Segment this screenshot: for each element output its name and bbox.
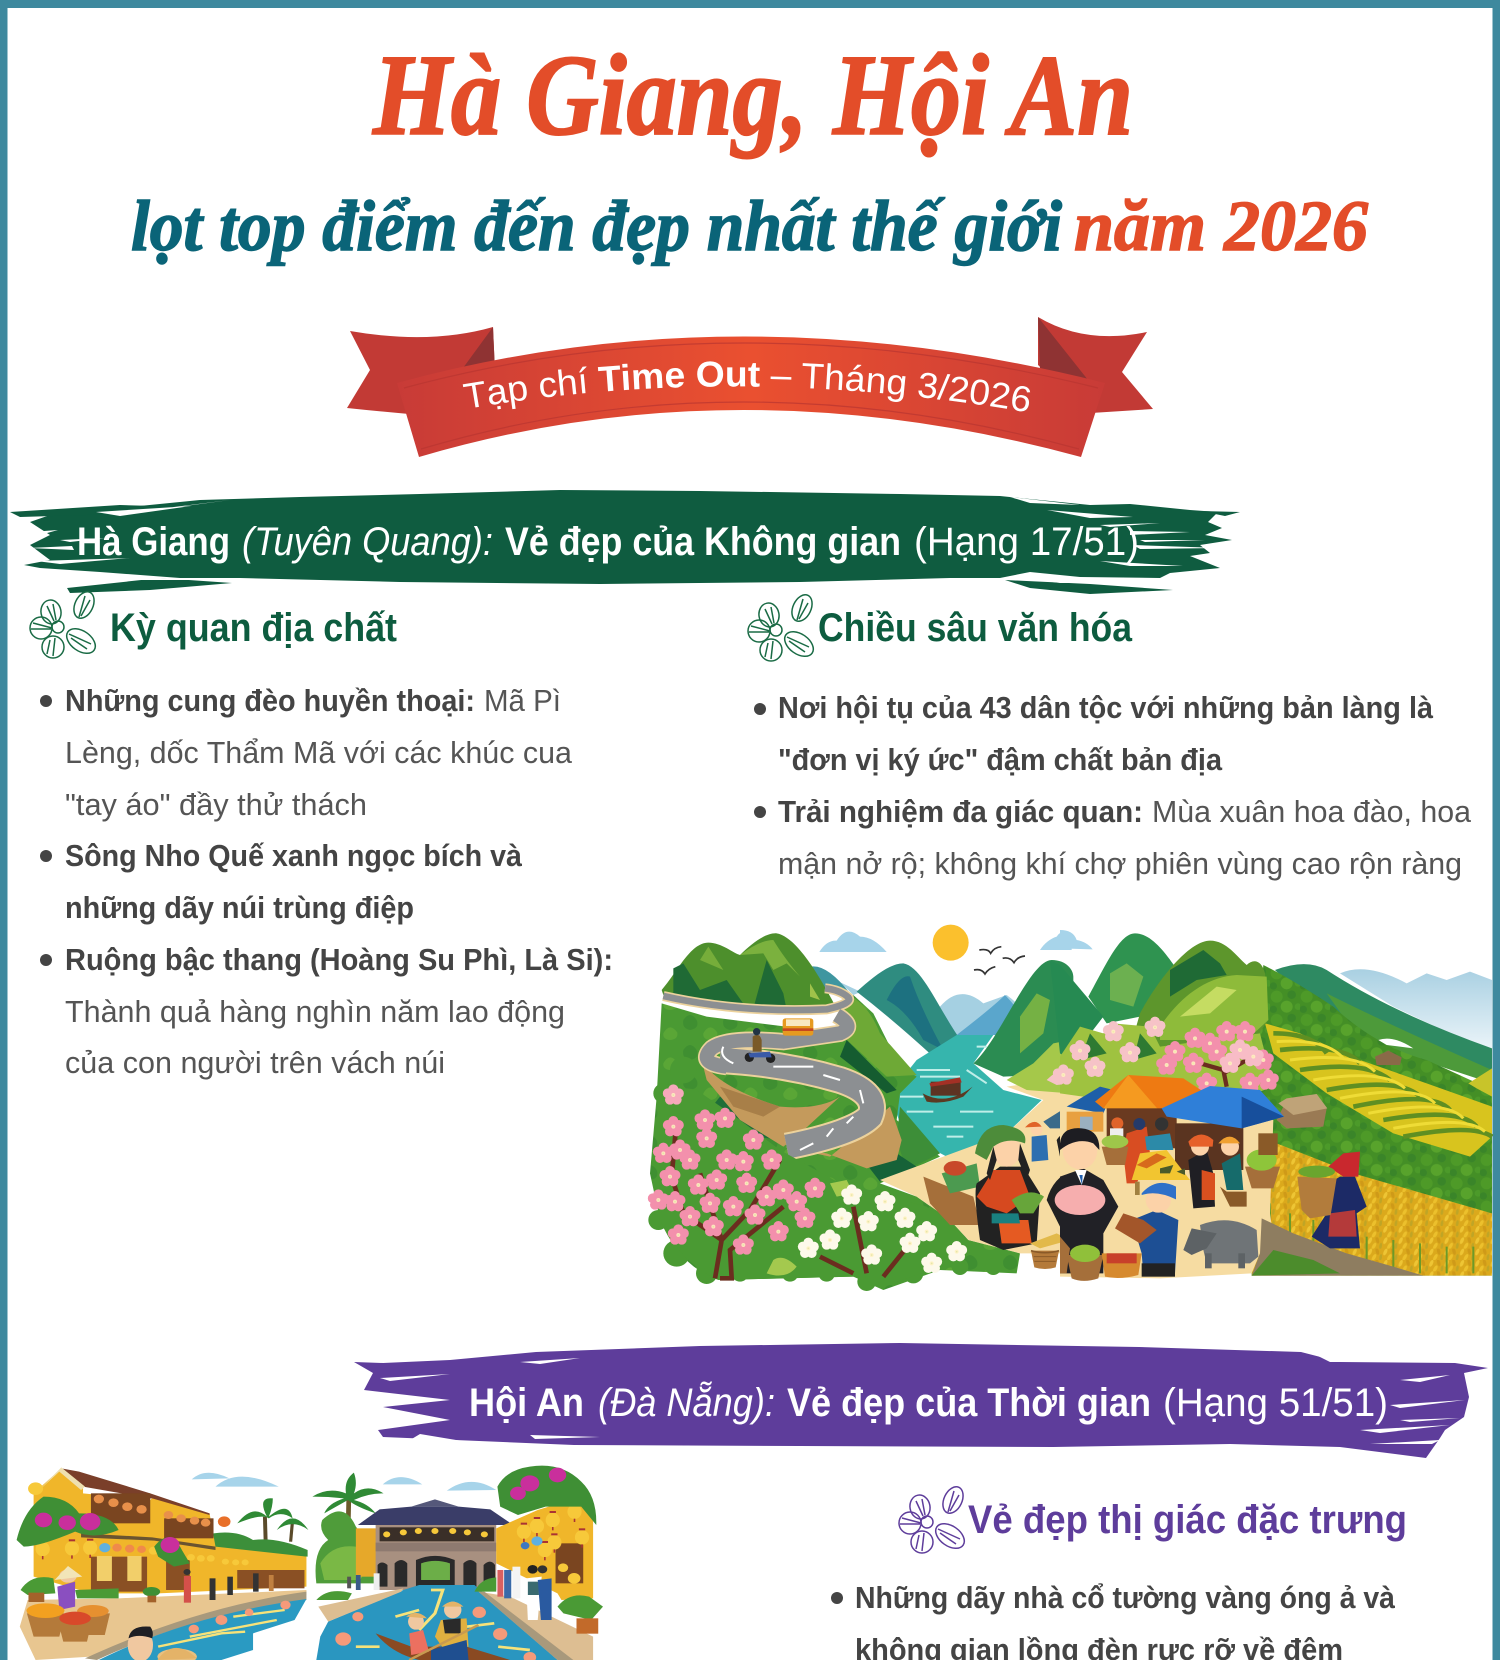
illustration left half <box>648 925 1073 1291</box>
title line 2 red: năm 2026 <box>1074 186 1368 266</box>
van <box>783 1018 813 1036</box>
man with pig <box>1060 1168 1118 1273</box>
green brush stroke <box>10 490 1240 594</box>
goods table <box>1132 1150 1190 1180</box>
floating lotus <box>189 1601 291 1633</box>
title line 1: Hà Giang, Hội An <box>372 32 1133 159</box>
pink blossoms <box>648 1084 825 1255</box>
palm right <box>342 1500 355 1538</box>
forest ridge <box>1275 964 1492 1083</box>
man's shoulder <box>1047 1170 1073 1230</box>
right trees <box>316 1511 376 1583</box>
illustration right half <box>1050 930 1492 1281</box>
bullet list: Trải nghiệm đa giác quan: <box>778 794 1143 829</box>
sun <box>933 925 969 961</box>
bullet list: Lèng, dốc Thẩm Mã với các khúc cua <box>65 735 573 770</box>
yellow side wall left <box>356 1528 378 1577</box>
bullet list: những dãy núi trùng điệp <box>65 890 414 925</box>
farmer woman and basket <box>1312 1177 1367 1248</box>
basket front <box>1031 1251 1059 1269</box>
section band: Hà Giang <box>10 490 1240 594</box>
band heading text <box>469 1380 1388 1425</box>
band heading text: (Tuyên Quang): <box>242 520 493 564</box>
green mountain by river <box>973 960 1073 1077</box>
boat <box>923 1087 973 1103</box>
sand path <box>880 1077 1073 1253</box>
fruit baskets <box>27 1613 65 1637</box>
vendors <box>1188 1150 1215 1208</box>
band heading text: (Hạng 51/51) <box>1163 1381 1388 1425</box>
canal <box>316 1585 558 1660</box>
palm left <box>260 1517 271 1543</box>
icon: purple flower <box>899 1484 969 1553</box>
title line 2 teal: lọt top điểm đến đẹp nhất thế giới <box>131 186 1062 266</box>
canal walkways <box>478 1592 593 1660</box>
walkway <box>20 1590 306 1660</box>
purple brush stroke <box>354 1343 1488 1458</box>
green bush slope <box>1060 1023 1273 1107</box>
title <box>131 32 1368 266</box>
section band: Hội An <box>354 1343 1488 1458</box>
front green mountains <box>1088 933 1175 1023</box>
rice terraces <box>1265 1023 1492 1157</box>
basket of vegetables <box>923 1177 980 1225</box>
band heading text: Hội An <box>469 1381 584 1425</box>
panel: Vẻ đẹp thị giác đặc trưng <box>831 1484 1407 1660</box>
teal mountain <box>857 963 965 1057</box>
band heading text: (Hạng 17/51) <box>914 520 1139 564</box>
bullet list: của con người trên vách núi <box>65 1045 445 1080</box>
boy with rooster <box>1132 1210 1178 1273</box>
stall people <box>1123 1127 1150 1183</box>
orange tent <box>1095 1075 1203 1110</box>
bullet list <box>754 690 1472 881</box>
bullet list: Những cung đèo huyền thoại: <box>65 683 475 718</box>
band heading text <box>77 520 1139 564</box>
heading: Chiều sâu văn hóa <box>818 606 1133 650</box>
far mountains <box>807 966 1040 1037</box>
bullet list: Ruộng bậc thang (Hoàng Su Phì, Là Si): <box>65 942 613 977</box>
light blossoms <box>1053 1017 1165 1085</box>
clouds <box>192 1473 496 1491</box>
bullet list: Nơi hội tụ của 43 dân tộc với những bản làng là <box>778 690 1434 725</box>
vegetable baskets <box>1102 1147 1128 1165</box>
arches <box>416 1556 455 1587</box>
winding road <box>663 988 872 1150</box>
pink tree <box>1200 1060 1247 1087</box>
small house on hill <box>1375 1051 1402 1065</box>
ribbon left tail <box>347 327 495 415</box>
water <box>99 1599 306 1660</box>
bullet list: mận nở rộ; không khí chợ phiên vùng cao rộn ràng <box>778 846 1462 881</box>
ribbon banner: Tạp chí Time Out – Tháng 3/2026 <box>462 361 1030 412</box>
band heading text: (Đà Nẵng): <box>598 1380 775 1425</box>
panel: Kỳ quan địa chất <box>30 589 613 1080</box>
band heading text: Vẻ đẹp của Không gian <box>505 520 901 564</box>
icon: green flower <box>30 589 100 658</box>
ribbon main band <box>397 336 1105 457</box>
bullet list: "tay áo" đầy thử thách <box>65 787 367 822</box>
yellow buildings right <box>496 1497 593 1600</box>
illustration: Hội An <box>17 1466 603 1660</box>
icon: green flower right <box>748 592 818 661</box>
ribbon right tail <box>1038 317 1153 413</box>
upper lanterns <box>94 1495 210 1527</box>
vendor woman <box>57 1582 75 1610</box>
cloud wisp <box>1378 1039 1413 1048</box>
stall goods <box>1043 1105 1070 1128</box>
buffalo <box>1200 1220 1258 1263</box>
road cliff <box>702 1060 902 1168</box>
band heading text: Vẻ đẹp của Thời gian <box>787 1381 1151 1425</box>
plants right <box>474 1577 496 1592</box>
canal lotus <box>335 1607 536 1660</box>
front baskets <box>1067 1255 1103 1281</box>
lower lanterns <box>36 1540 50 1559</box>
panel: Chiều sâu văn hóa <box>748 592 1472 881</box>
rice field <box>1252 1143 1492 1276</box>
people on bank <box>526 1577 542 1620</box>
forest base <box>1252 965 1492 1276</box>
upper green mountains <box>662 933 837 1012</box>
bougainvillea top right <box>497 1466 596 1525</box>
ribbon banner <box>347 317 1153 457</box>
passers-by <box>183 1569 274 1603</box>
bullet list: Sông Nho Quế xanh ngọc bích và <box>65 838 523 873</box>
heading: Kỳ quan địa chất <box>110 606 397 650</box>
small person in blue <box>1032 1135 1048 1162</box>
boat couple <box>376 1633 510 1660</box>
bougainvillea <box>17 1497 119 1547</box>
bullet list: Mùa xuân hoa đào, hoa <box>1152 794 1472 829</box>
bullet list: Thành quả hàng nghìn năm lao động <box>65 994 565 1029</box>
rocks and plants <box>1252 1218 1423 1276</box>
birds <box>974 947 1025 974</box>
yellow shophouses <box>34 1468 306 1593</box>
thatched house <box>1277 1095 1327 1128</box>
hillside greenery <box>650 995 1020 1290</box>
misty mountains <box>1340 969 1492 1053</box>
foliage bumps <box>648 1057 1002 1291</box>
motorbike <box>745 1053 754 1062</box>
illustration: Hà Giang landscape <box>648 925 1492 1291</box>
band heading text: Hà Giang <box>77 520 230 564</box>
back stall <box>1067 1087 1113 1113</box>
couple at bottom <box>128 1628 153 1660</box>
bullet list: Mã Pì <box>484 683 561 718</box>
river <box>890 1035 1042 1157</box>
bullet list: "đơn vị ký ức" đậm chất bản địa <box>778 742 1223 777</box>
clouds <box>819 932 887 952</box>
trees behind shops <box>214 1532 308 1557</box>
woman with green scarf <box>976 1167 1040 1250</box>
far terrace <box>1468 1068 1492 1097</box>
ribbon text <box>466 386 1032 413</box>
plants <box>21 1577 55 1595</box>
white blossoms <box>798 1184 967 1273</box>
bullet list: Những dãy nhà cổ tường vàng óng ả và <box>855 1580 1396 1615</box>
blue tent <box>1175 1123 1243 1170</box>
sand <box>1060 1093 1273 1278</box>
bullet list <box>40 683 613 1080</box>
covered bridge <box>376 1525 496 1590</box>
heading: Vẻ đẹp thị giác đặc trưng <box>968 1498 1407 1542</box>
blossom tree foliage <box>660 1089 970 1287</box>
cloud <box>1060 930 1093 949</box>
bullet list <box>831 1580 1396 1660</box>
